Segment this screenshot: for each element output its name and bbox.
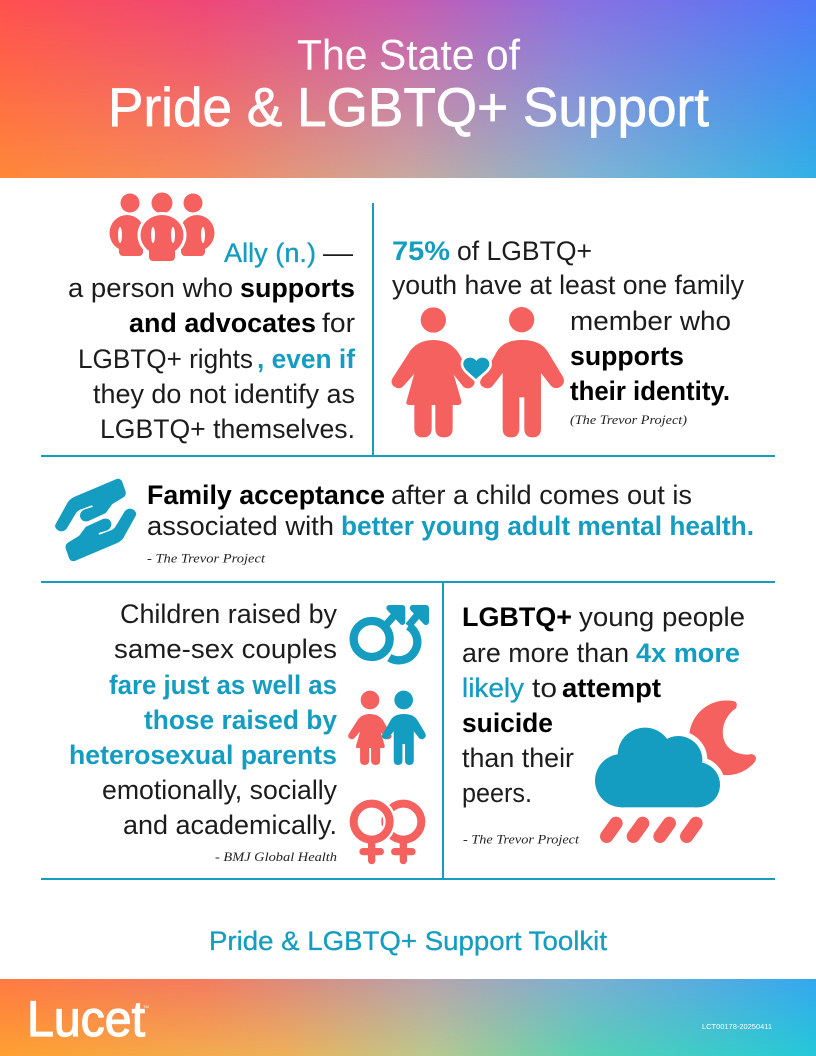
- ally definition text: , even if: [257, 344, 356, 374]
- suicide risk text: to: [532, 673, 557, 703]
- suicide risk text: are more than: [462, 638, 629, 668]
- ally definition text: and advocates: [129, 308, 316, 338]
- source: The Trevor Project: - The Trevor Project: [147, 550, 265, 566]
- title: [108, 32, 709, 138]
- panel: suicide risk: [462, 602, 756, 846]
- icon: two children: [349, 691, 425, 764]
- same-sex parents text: and academically.: [123, 810, 337, 840]
- same-sex parents text: fare just as well as: [109, 670, 337, 700]
- ally definition text: supports: [240, 273, 355, 303]
- family acceptance text: after a child comes out is: [391, 480, 692, 510]
- ally definition text: Ally (n.): [224, 238, 316, 268]
- ally definition text: —: [323, 238, 353, 268]
- family acceptance text: associated with: [147, 511, 334, 541]
- statistic text: of LGBTQ+: [457, 236, 592, 266]
- footer gradient band: [0, 979, 816, 1056]
- ally definition text: a person who: [68, 273, 233, 303]
- panel: family support statistic: [392, 236, 744, 436]
- ally definition text: LGBTQ+ rights: [78, 344, 253, 374]
- toolkit heading: Pride & LGBTQ+ Support Toolkit: [209, 926, 607, 956]
- suicide risk text: young people: [579, 602, 745, 632]
- document code: LCT00178-20250411: [702, 1022, 772, 1031]
- ally definition text: [68, 238, 356, 444]
- suicide risk text: attempt: [562, 673, 661, 703]
- header gradient band: [0, 0, 816, 178]
- same-sex parents text: Children raised by: [120, 599, 337, 629]
- icon: group of three people: [110, 192, 214, 261]
- ally definition text: for: [322, 308, 355, 338]
- source: The Trevor Project: (The Trevor Project): [570, 412, 687, 427]
- icon: male symbols: [354, 608, 426, 660]
- icon: caring hands: [56, 480, 135, 560]
- panel: ally definition: [68, 192, 356, 444]
- ally definition text: they do not identify as: [93, 379, 355, 409]
- statistic text: 75%: [392, 236, 450, 266]
- family acceptance text: [147, 480, 754, 541]
- suicide risk text: LGBTQ+: [462, 602, 572, 632]
- suicide risk text: 4x more: [636, 638, 740, 668]
- title: The State of: [297, 32, 521, 80]
- statistic text: [392, 236, 744, 406]
- panel: same-sex parents: [69, 599, 426, 864]
- family acceptance text: better young adult mental health.: [341, 511, 754, 541]
- source: BMJ Global Health: - BMJ Global Health: [215, 849, 337, 864]
- family acceptance text: Family acceptance: [147, 480, 385, 510]
- icon: two figures holding a heart: [392, 307, 563, 436]
- statistic text: their identity.: [570, 376, 730, 406]
- same-sex parents text: heterosexual parents: [69, 740, 337, 770]
- statistic text: supports: [570, 341, 684, 371]
- icon: rain cloud and moon: [595, 700, 756, 836]
- same-sex parents text: [69, 599, 337, 840]
- suicide risk text: [462, 602, 745, 808]
- source: The Trevor Project: - The Trevor Project: [463, 832, 579, 846]
- suicide risk text: likely: [462, 673, 525, 703]
- panel: family acceptance: [56, 480, 754, 566]
- logo: Lucet: Lucet: [27, 991, 145, 1047]
- statistic text: member who: [570, 306, 731, 336]
- logo: Lucet: TM: [143, 1004, 149, 1009]
- statistic text: youth have at least one family: [392, 270, 744, 300]
- same-sex parents text: those raised by: [144, 705, 337, 735]
- suicide risk text: suicide: [462, 708, 553, 738]
- suicide risk text: peers.: [462, 778, 532, 808]
- icon: female symbols: [354, 804, 421, 861]
- title: Pride & LGBTQ+ Support: [108, 76, 709, 138]
- ally definition text: LGBTQ+ themselves.: [100, 414, 355, 444]
- suicide risk text: than their: [462, 743, 574, 773]
- same-sex parents text: same-sex couples: [114, 634, 337, 664]
- same-sex parents text: emotionally, socially: [102, 775, 337, 805]
